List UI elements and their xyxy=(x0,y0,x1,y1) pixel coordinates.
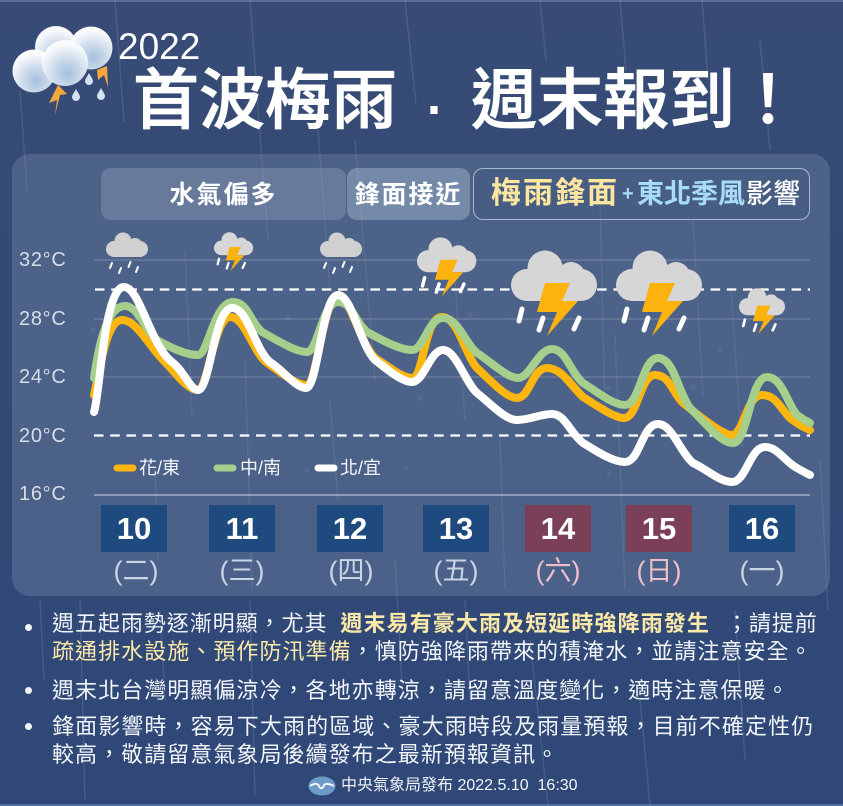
header box: moisture xyxy=(101,168,346,220)
weekday Tue: (二) xyxy=(114,556,158,586)
text line 2: 疏通排水設施、預作防汛準備，慎防強降雨帶來的積淹水，並請注意安全。 xyxy=(52,639,813,664)
legend: Central/South: 中/南 xyxy=(240,458,281,478)
date 13 xyxy=(423,505,489,552)
label 24C: 24°C xyxy=(19,366,66,388)
date 11: 11 xyxy=(226,511,258,546)
label 32C: 32°C xyxy=(19,249,66,271)
header box: plum rain front and northeast monsoon xyxy=(473,168,810,220)
bullet 2 xyxy=(25,687,32,694)
temperature line chart xyxy=(90,232,814,496)
legend: North/Yilan: 北/宜 xyxy=(340,458,381,478)
bullet 1 xyxy=(25,624,32,631)
text line 5: 較高，敬請留意氣象局後續發布之最新預報資訊。 xyxy=(52,742,559,767)
header box: front approaching xyxy=(347,168,470,220)
date 12: 12 xyxy=(333,511,367,546)
text line 1: 週五起雨勢逐漸明顯，尤其 週末易有豪大雨及短延時強降雨發生 ；請提前 xyxy=(52,611,818,636)
title xyxy=(133,63,801,142)
label 20C: 20°C xyxy=(19,425,66,447)
title year: 2022 xyxy=(118,26,200,67)
icon: CWB logo xyxy=(308,776,336,796)
icon: thunderstorm day 11 xyxy=(214,232,253,271)
date 12 xyxy=(317,505,383,552)
weekday Sat: (六) xyxy=(536,556,580,586)
weekday Mon: (一) xyxy=(740,556,784,586)
bullet 3 xyxy=(25,723,32,730)
date 15 weekend xyxy=(626,505,692,552)
date 14 weekend xyxy=(525,505,591,552)
date 10 xyxy=(101,505,167,552)
title: 首波梅雨 xyxy=(133,63,397,137)
header box: plum rain front and northeast monsoon: 東北季風 xyxy=(637,179,745,209)
header box: plum rain front and northeast monsoon: 影響 xyxy=(746,179,800,209)
legend swatches xyxy=(117,464,334,472)
weekday Thu: (四) xyxy=(328,556,373,586)
weekday Wed: (三) xyxy=(220,556,264,586)
date 13: 13 xyxy=(439,511,473,546)
bullet text block xyxy=(25,611,818,767)
icon: thunderstorm day 14 xyxy=(511,250,597,336)
date 10: 10 xyxy=(117,511,151,546)
icon: rain cloud day 12 xyxy=(320,232,362,273)
publisher footer: 中央氣象局發布 2022.5.10 16:30 xyxy=(341,777,578,794)
text line 3: 週末北台灣明顯偏涼冷，各地亦轉涼，請留意溫度變化，適時注意保暖。 xyxy=(52,678,790,703)
date 15 weekend: 15 xyxy=(642,511,676,546)
icon: thunderstorm day 16 xyxy=(739,288,785,334)
line: North/Yilan xyxy=(94,287,810,482)
label 16C: 16°C xyxy=(19,483,66,505)
icon: storm cloud with lightning and raindrops xyxy=(12,26,112,115)
date 14 weekend: 14 xyxy=(541,511,575,546)
icon: thunderstorm day 15 xyxy=(616,250,702,336)
weekday Fri: (五) xyxy=(434,556,478,586)
label 28C: 28°C xyxy=(19,308,66,330)
icon: thunderstorm day 13 xyxy=(417,237,476,296)
icon: rain cloud day 10 xyxy=(106,232,148,273)
line: Central/South xyxy=(94,302,810,443)
temperature axis labels xyxy=(19,249,66,505)
legend: Hualien/Taitung: 花/東 xyxy=(139,458,180,478)
header box: front approaching: 鋒面接近 xyxy=(354,181,462,209)
date 16 xyxy=(729,505,795,552)
date 16: 16 xyxy=(745,511,779,546)
header box: moisture: 水氣偏多 xyxy=(169,181,278,209)
weekday Sun: (日) xyxy=(636,556,681,586)
date 11 xyxy=(209,505,275,552)
title: · xyxy=(423,68,445,142)
title: 週末報到！ xyxy=(471,63,801,137)
text line 4: 鋒面影響時，容易下大雨的區域、豪大雨時段及雨量預報，目前不確定性仍 xyxy=(52,714,814,739)
line: Hualien/Taitung xyxy=(94,298,810,435)
header box: plum rain front and northeast monsoon: 梅雨鋒面 xyxy=(491,177,619,210)
header box: plum rain front and northeast monsoon: + xyxy=(622,183,634,205)
